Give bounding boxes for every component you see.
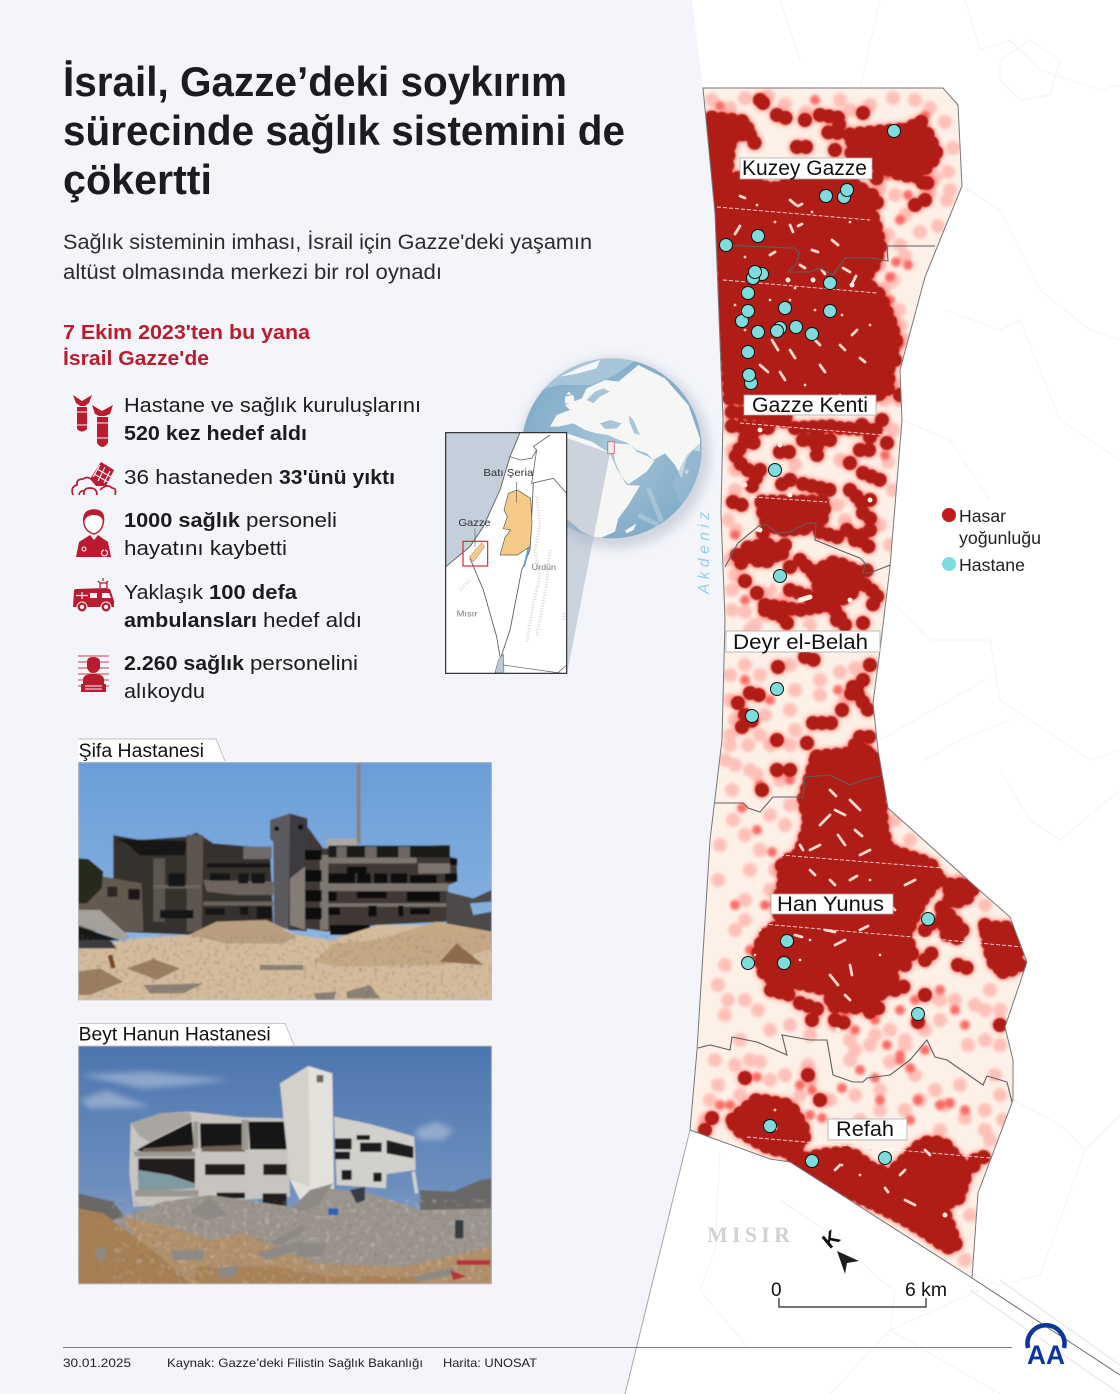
ground (78, 922, 492, 1000)
stat: ambulances targeted: ambulansları (124, 609, 257, 632)
legend (942, 506, 1041, 575)
map base: land beyond the strip (625, 0, 1120, 1394)
dark chains (732, 115, 1018, 1175)
low density dots (705, 96, 1003, 1260)
tower (270, 813, 307, 932)
district label: Deyr el-Belah: Deyr el-Belah (733, 631, 868, 654)
locator map inset (446, 433, 567, 674)
locator map inset: Ürdün (532, 562, 556, 572)
strip outline (690, 88, 1027, 1278)
rubble (113, 1188, 492, 1284)
subtitle: altüst olmasında merkezi bir rol oynadı (63, 261, 442, 284)
mid density dots (720, 100, 965, 1120)
icon: bombs (73, 395, 113, 447)
stat: personnel detained: alıkoydu (124, 680, 205, 703)
title (63, 58, 625, 203)
legend: Hastane (959, 555, 1025, 575)
red heading: İsrail Gazze'de (63, 347, 209, 370)
subtitle: Sağlık sisteminin imhası, İsrail için Gazze'deki yaşamın (63, 231, 592, 254)
gaps in the dense areas (735, 196, 930, 1205)
location marker (608, 442, 614, 454)
sea label: Akdeniz: Akdeniz (696, 512, 713, 595)
right wing (334, 1117, 416, 1188)
gaps, larger (745, 158, 945, 1215)
stat: personnel detained: 2.260 sağlık (124, 652, 245, 675)
stat: personnel detained (78, 652, 358, 703)
legend: Hasar (959, 506, 1006, 526)
stat: ambulances targeted: 100 defa (209, 581, 298, 604)
globe (520, 358, 710, 548)
stat: hospitals targeted (73, 394, 421, 447)
projection beam (567, 438, 610, 674)
photo tab label: Şifa Hastanesi (79, 741, 204, 762)
dark filled blocks with scalloped edges (712, 118, 1018, 1247)
footer: Kaynak: Gazze’deki Filistin Sağlık Bakanlığı (167, 1356, 423, 1370)
scale bar: 0 (771, 1280, 782, 1301)
stat: ambulances targeted: Yaklaşık (124, 581, 204, 604)
white dashed roads (717, 207, 1023, 1158)
logo: AA: AA (1027, 1340, 1065, 1370)
legend: yoğunluğu (959, 528, 1041, 548)
photo tab label: Beyt Hanun Hastanesi (79, 1025, 271, 1046)
district label: Kuzey Gazze: Kuzey Gazze (742, 157, 867, 180)
stat: hospitals destroyed: 33'ünü yıktı (279, 466, 395, 489)
stat: ambulances targeted (73, 578, 362, 632)
scale bar: 6 km (905, 1280, 947, 1301)
stat: hospitals destroyed (72, 462, 395, 495)
stat: personnel killed (76, 509, 337, 560)
stat: hospitals targeted: 520 kez hedef aldı (124, 422, 307, 445)
locator map inset: Batı Şeria (483, 468, 534, 479)
photo: Beyt Hanun Hastanesi (78, 1023, 492, 1284)
icon: detained person (78, 656, 109, 692)
stat: hospitals destroyed: 36 hastaneden (124, 466, 273, 489)
photo: Şifa Hastanesi (78, 739, 492, 1000)
icon: collapsing building (72, 462, 116, 495)
tower (280, 1066, 334, 1207)
strip base (690, 88, 1027, 1278)
red heading: 7 Ekim 2023'ten bu yana (63, 322, 311, 344)
district label: Refah: Refah (836, 1118, 894, 1141)
north arrow: K (818, 1226, 845, 1253)
district label: Han Yunus: Han Yunus (777, 893, 884, 916)
locator map inset: Gazze (458, 518, 491, 529)
stat: hospitals targeted: Hastane ve sağlık kuruluşlarını (124, 394, 421, 417)
icon: doctor (76, 510, 111, 557)
country label: Mısır: MISIR (707, 1222, 791, 1247)
stat: ambulances targeted: hedef aldı (263, 609, 362, 632)
district borders (698, 245, 1012, 1102)
title: sürecinde sağlık sistemini de (63, 107, 625, 154)
scale bar (771, 1280, 947, 1307)
footer (63, 1348, 1012, 1370)
title: çökertti (63, 156, 212, 203)
district label: Gazze Kenti: Gazze Kenti (752, 394, 868, 417)
high density (dark) areas (705, 100, 1020, 1247)
ruined skyline (78, 1178, 492, 1221)
subtitle (63, 231, 592, 284)
map: damage density strip (690, 88, 1027, 1278)
left wing (113, 833, 273, 935)
stat: personnel killed: personeli (246, 509, 337, 532)
footer: Harita: UNOSAT (443, 1356, 538, 1370)
footer: 30.01.2025 (63, 1356, 131, 1370)
stat: personnel killed: hayatını kaybetti (124, 537, 287, 560)
dark single dots (705, 100, 1020, 1130)
title: İsrail, Gazze’deki soykırım (63, 58, 567, 105)
icon: ambulance (73, 578, 114, 612)
left block (129, 1112, 290, 1207)
locator map inset: Mısır (457, 609, 478, 619)
north arrow (818, 1226, 859, 1274)
hospital markers (720, 124, 934, 1168)
stat: personnel detained: personelini (250, 652, 358, 675)
red heading (63, 322, 311, 370)
stat: personnel killed: 1000 sağlık (124, 509, 241, 532)
logo: AA (1027, 1325, 1065, 1370)
right wing (305, 827, 457, 932)
